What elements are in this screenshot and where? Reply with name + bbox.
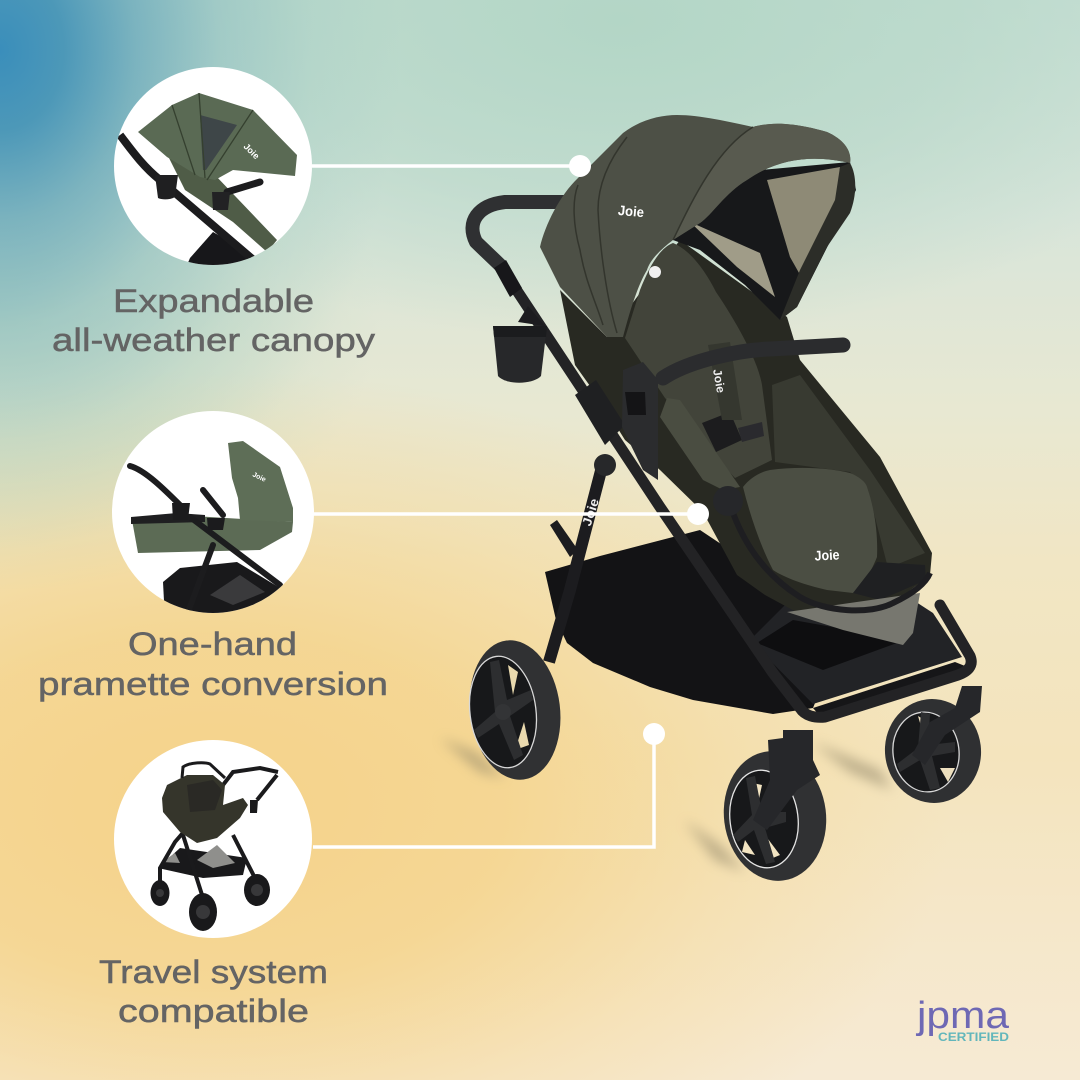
- Joie logo seat: Joie: [710, 368, 728, 394]
- hub slot: [625, 392, 646, 415]
- thumbnail canopy fabric: [138, 93, 297, 180]
- thumbnail carry handle: [182, 763, 225, 778]
- thumbnail basket: [158, 848, 247, 878]
- foot area: [853, 562, 926, 600]
- strut hinge: [594, 454, 616, 476]
- platform footrest: [750, 600, 962, 704]
- label: pramette: One-hand: [128, 626, 297, 662]
- thumbnail basket: [163, 562, 280, 613]
- thumbnail cup holder: [155, 175, 178, 199]
- label: travel system: [99, 954, 328, 1029]
- thumbnail seat: [169, 158, 277, 250]
- label: pramette: [38, 626, 388, 702]
- thumbnail mesh window: [200, 115, 237, 170]
- leg rest: [743, 468, 877, 593]
- ground shadows: [440, 738, 892, 872]
- thumbnail cup: [250, 800, 258, 813]
- callout dot: canopy: [569, 155, 591, 177]
- cup holder: [493, 306, 547, 383]
- thumbnail cup: [172, 503, 190, 514]
- left front strut: [549, 463, 603, 662]
- grey panel: [787, 593, 920, 645]
- canopy visor highlight: [673, 124, 850, 240]
- handle joint: [494, 260, 522, 297]
- thumbnail frame: [130, 466, 280, 612]
- label: canopy: [52, 283, 375, 358]
- canopy beige lower: [690, 222, 775, 297]
- seat right fabric: [772, 375, 925, 568]
- connector: canopy callout line: [312, 164, 580, 168]
- label: pramette: pramette conversion: [38, 666, 388, 702]
- logo: jpma certified: CERTIFIED: [938, 1030, 1009, 1044]
- label: canopy: all-weather canopy: [52, 322, 375, 358]
- seat badge: [649, 266, 661, 278]
- harness shoulder strap: [708, 342, 742, 420]
- feature circle: canopy: [114, 67, 312, 268]
- canopy inner base: [673, 162, 856, 320]
- tray bar: [733, 513, 930, 610]
- thumbnail seams: [172, 93, 253, 180]
- seat liner: [625, 243, 772, 478]
- callout dot: travel system: [643, 723, 665, 745]
- storage basket: [545, 530, 840, 714]
- front fork: [753, 730, 820, 830]
- label: canopy: Expandable: [113, 283, 314, 319]
- main stroller illustration: [440, 115, 987, 887]
- canopy right edge: [780, 163, 855, 320]
- connector: pramette callout line: [313, 512, 698, 516]
- rear fork: [912, 686, 982, 765]
- arm bar: [663, 345, 843, 378]
- logo: jpma certified: jpma: [916, 995, 1010, 1037]
- thumbnail frame: [160, 768, 278, 898]
- thumbnail hood: [228, 441, 293, 522]
- Joie logo canopy: Joie: [617, 202, 645, 220]
- canopy seams: [574, 127, 753, 333]
- rear right wheel: [879, 694, 987, 808]
- thumbnail frame: [120, 135, 257, 263]
- seat backing: [560, 240, 932, 614]
- side pad: [660, 398, 740, 490]
- thumbnail arm: [227, 182, 260, 192]
- Joie logo frame: Joie: [579, 497, 602, 528]
- thumbnail car seat: [162, 775, 248, 843]
- Joie logo leg rest: Joie: [814, 546, 840, 564]
- thumbnail wheels: [150, 880, 170, 906]
- canopy outer shell: [540, 115, 850, 337]
- thumbnail under frame: [188, 232, 251, 265]
- strut clip: [550, 520, 578, 557]
- frame: [473, 202, 971, 717]
- front wheel: [716, 745, 834, 887]
- thumbnail carrycot: [132, 515, 293, 553]
- thumbnail logo: Joie: [251, 471, 267, 484]
- frame bracket: [575, 380, 625, 445]
- harness strap: [738, 422, 764, 442]
- label: travel system: compatible: [118, 993, 309, 1029]
- canopy beige lining: [767, 167, 840, 280]
- seat hub: [622, 362, 658, 480]
- label: travel system: Travel system: [99, 954, 328, 990]
- thumbnail hub: [207, 518, 225, 530]
- rear left wheel: [462, 635, 568, 785]
- harness buckle: [702, 412, 742, 452]
- connector: travel system callout line: [313, 734, 654, 847]
- feature circle: travel system: [114, 740, 312, 938]
- hinge: [713, 486, 743, 516]
- thumbnail hub: [212, 192, 230, 210]
- feature circle: pramette: [112, 411, 314, 620]
- thumbnail logo: Joie: [242, 141, 261, 161]
- callout dot: pramette: [687, 503, 709, 525]
